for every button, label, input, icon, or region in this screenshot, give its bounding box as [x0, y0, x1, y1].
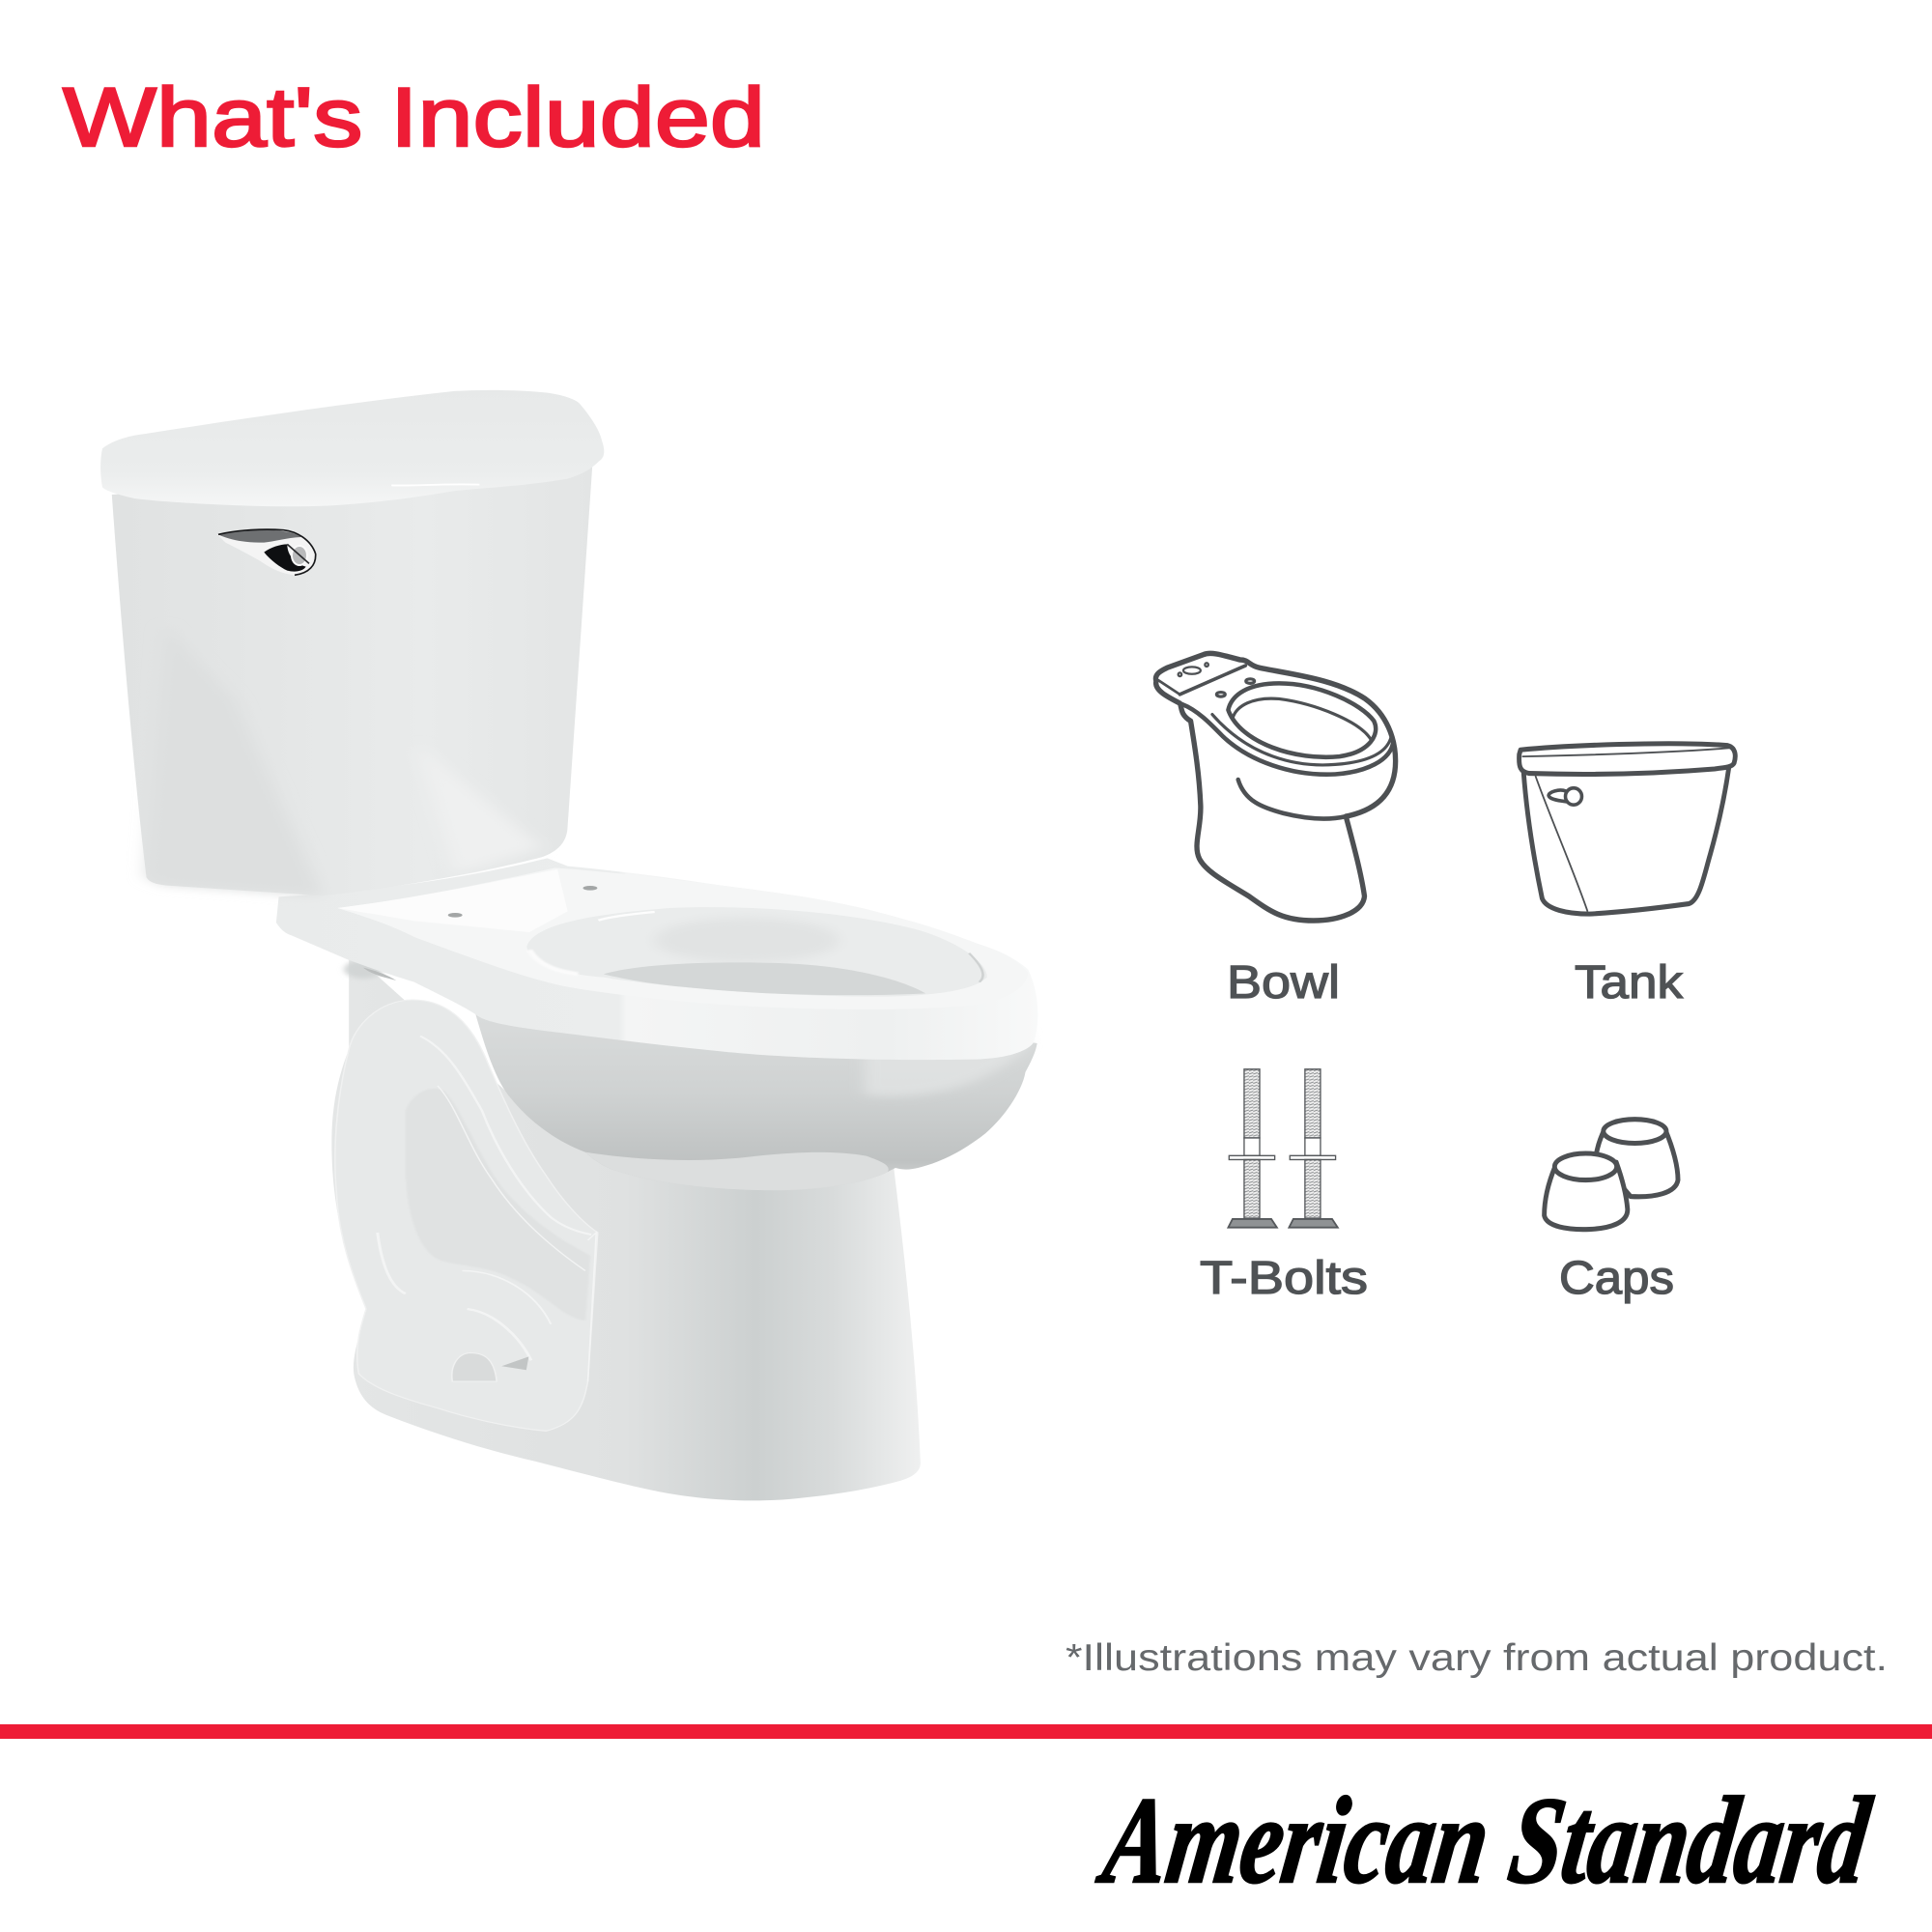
- footnote: *Illustrations may vary from actual product.: [1065, 1637, 1888, 1679]
- label: Tank: Tank: [1575, 957, 1684, 1009]
- rim top surface: [337, 867, 1028, 1009]
- label: T-Bolts: T-Bolts: [1200, 1253, 1368, 1304]
- recessed side panel: [335, 1000, 598, 1431]
- pedestal: [331, 951, 921, 1500]
- bowl body: [276, 858, 1037, 1190]
- red divider bar: [0, 1724, 1932, 1739]
- icon: T-bolts: [1228, 1069, 1338, 1228]
- lid: [100, 390, 604, 506]
- seat opening: [526, 907, 987, 997]
- label: Bowl: Bowl: [1227, 957, 1340, 1009]
- flush handle: [217, 529, 316, 575]
- label: Caps: Caps: [1559, 1253, 1674, 1304]
- icon: caps: [1545, 1120, 1678, 1230]
- title: What's Included: [63, 71, 765, 164]
- icon: tank: [1520, 744, 1735, 914]
- icon: bowl: [1155, 653, 1396, 921]
- water: [604, 962, 925, 995]
- tank: [100, 390, 604, 895]
- bolt holes: [448, 913, 463, 918]
- product photo: two-piece toilet: [100, 390, 1037, 1500]
- rim and deck: [276, 858, 1037, 1060]
